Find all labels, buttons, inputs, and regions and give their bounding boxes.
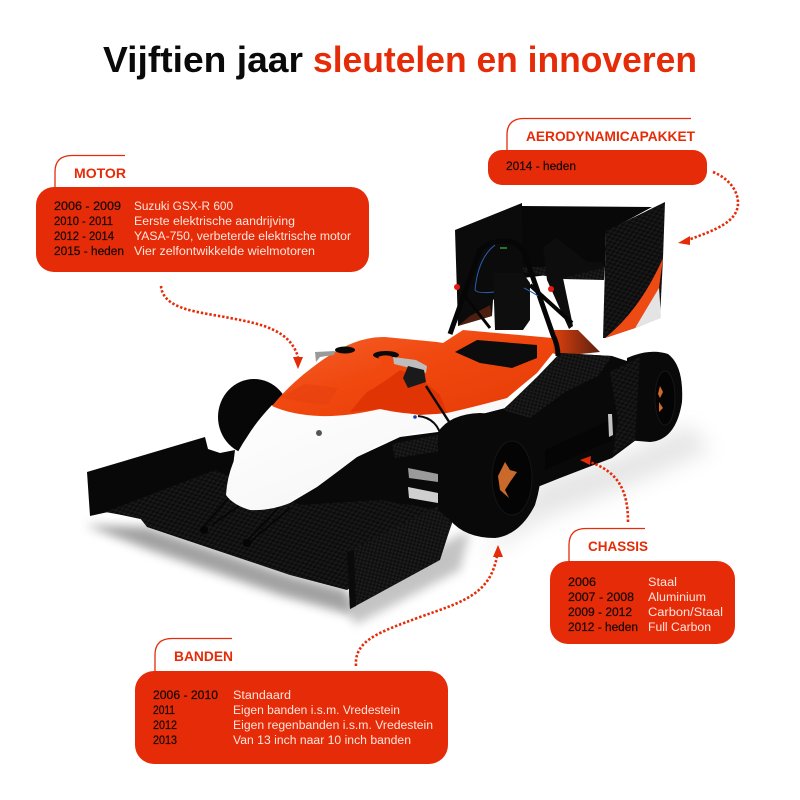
wing mounts	[203, 498, 290, 542]
banden rows: Van 13 inch naar 10 inch banden	[233, 735, 411, 747]
headrest	[493, 273, 530, 330]
race car illustration	[85, 202, 710, 625]
roll hoop and headrest	[450, 241, 572, 356]
rear wing left endplate	[455, 203, 523, 326]
banden tab outline	[155, 638, 232, 672]
motor rows: Suzuki GSX-R 600	[134, 201, 233, 213]
title	[103, 39, 697, 80]
motor box	[36, 187, 369, 272]
banden rows: Eigen regenbanden i.s.m. Vredestein	[233, 720, 433, 732]
chassis rows: 2006	[568, 577, 596, 589]
chassis rows: Carbon/Staal	[648, 607, 723, 619]
chassis rows: Staal	[648, 577, 677, 589]
panel: motor	[36, 156, 369, 272]
rear wing back panel	[480, 206, 652, 280]
motor tab outline	[55, 156, 125, 188]
wires	[475, 245, 538, 296]
rear wing	[455, 202, 665, 338]
rear wing lower element	[463, 266, 605, 290]
chassis box	[550, 561, 735, 644]
aero row: 2014 - heden	[506, 161, 576, 173]
roll hoop	[450, 241, 558, 356]
banden rows	[153, 690, 433, 747]
chassis rows: Full Carbon	[648, 622, 711, 634]
motor rows: 2010 - 2011	[54, 216, 113, 228]
cockpit opening	[455, 340, 537, 368]
banden rows: 2012	[153, 720, 177, 732]
ground shadow	[85, 425, 710, 625]
chassis rows: 2009 - 2012	[568, 607, 632, 619]
motor rows: Vier zelfontwikkelde wielmotoren	[134, 246, 315, 258]
motor rows: 2006 - 2009	[54, 201, 121, 213]
chassis side endplate	[610, 357, 640, 454]
title: Vijftien jaar	[103, 39, 303, 80]
chassis heading: CHASSIS	[588, 538, 648, 554]
chassis rows: 2012 - heden	[568, 622, 638, 634]
motor rows: 2015 - heden	[54, 246, 124, 258]
arrow: chassis	[580, 456, 628, 522]
chassis rows: Aluminium	[648, 592, 706, 604]
front mechanical parts	[315, 346, 455, 440]
arrow: banden	[356, 545, 503, 666]
wing right endplate	[347, 494, 462, 609]
endplate orange swoosh	[605, 258, 663, 338]
rear right wheel	[625, 352, 682, 442]
banden rows: 2006 - 2010	[153, 690, 218, 702]
white nose	[226, 396, 507, 510]
banden rows: 2011	[153, 705, 175, 717]
aero heading: AERODYNAMICAPAKKET	[526, 128, 695, 144]
banden rows: 2013	[153, 735, 177, 747]
arrow: aerodynamica	[678, 172, 738, 245]
chassis rows	[568, 577, 723, 634]
motor rows: 2012 - 2014	[54, 231, 115, 243]
wing floor	[105, 470, 440, 590]
title: sleutelen en innoveren	[313, 39, 697, 80]
motor rows	[54, 201, 351, 258]
panel: banden	[135, 638, 448, 764]
banden rows: Standaard	[233, 690, 291, 702]
motor rows: YASA-750, verbeterde elektrische motor	[134, 231, 351, 243]
panel: aerodynamicapakket	[488, 118, 707, 185]
banden rows: Eigen banden i.s.m. Vredestein	[233, 705, 400, 717]
front wing	[87, 437, 462, 609]
inner darker bodywork	[350, 370, 447, 415]
sidepod and chassis	[470, 353, 640, 486]
arrow: motor	[161, 286, 303, 369]
rear left wheel	[218, 379, 290, 455]
aero tab outline	[507, 118, 691, 151]
motor rows: Eerste elektrische aandrijving	[134, 216, 295, 228]
rear wing right endplate	[603, 202, 665, 338]
motor heading: MOTOR	[74, 165, 126, 181]
gaps in wing elements	[408, 468, 438, 482]
banden box	[135, 671, 448, 764]
rear wing support strut	[543, 238, 603, 329]
wing left endplate	[87, 437, 235, 520]
orange body	[272, 330, 553, 416]
rear orange deck	[550, 330, 600, 356]
under-nose black structure	[283, 408, 505, 530]
bonnet panel lines	[280, 384, 338, 405]
banden heading: BANDEN	[174, 648, 233, 664]
chassis rows: 2007 - 2008	[568, 592, 634, 604]
endplate white panel	[635, 287, 661, 328]
front right wheel	[438, 413, 541, 538]
aero box	[488, 150, 707, 185]
red markers	[454, 284, 460, 290]
chassis tab outline	[569, 528, 645, 562]
panel: chassis	[550, 528, 735, 644]
